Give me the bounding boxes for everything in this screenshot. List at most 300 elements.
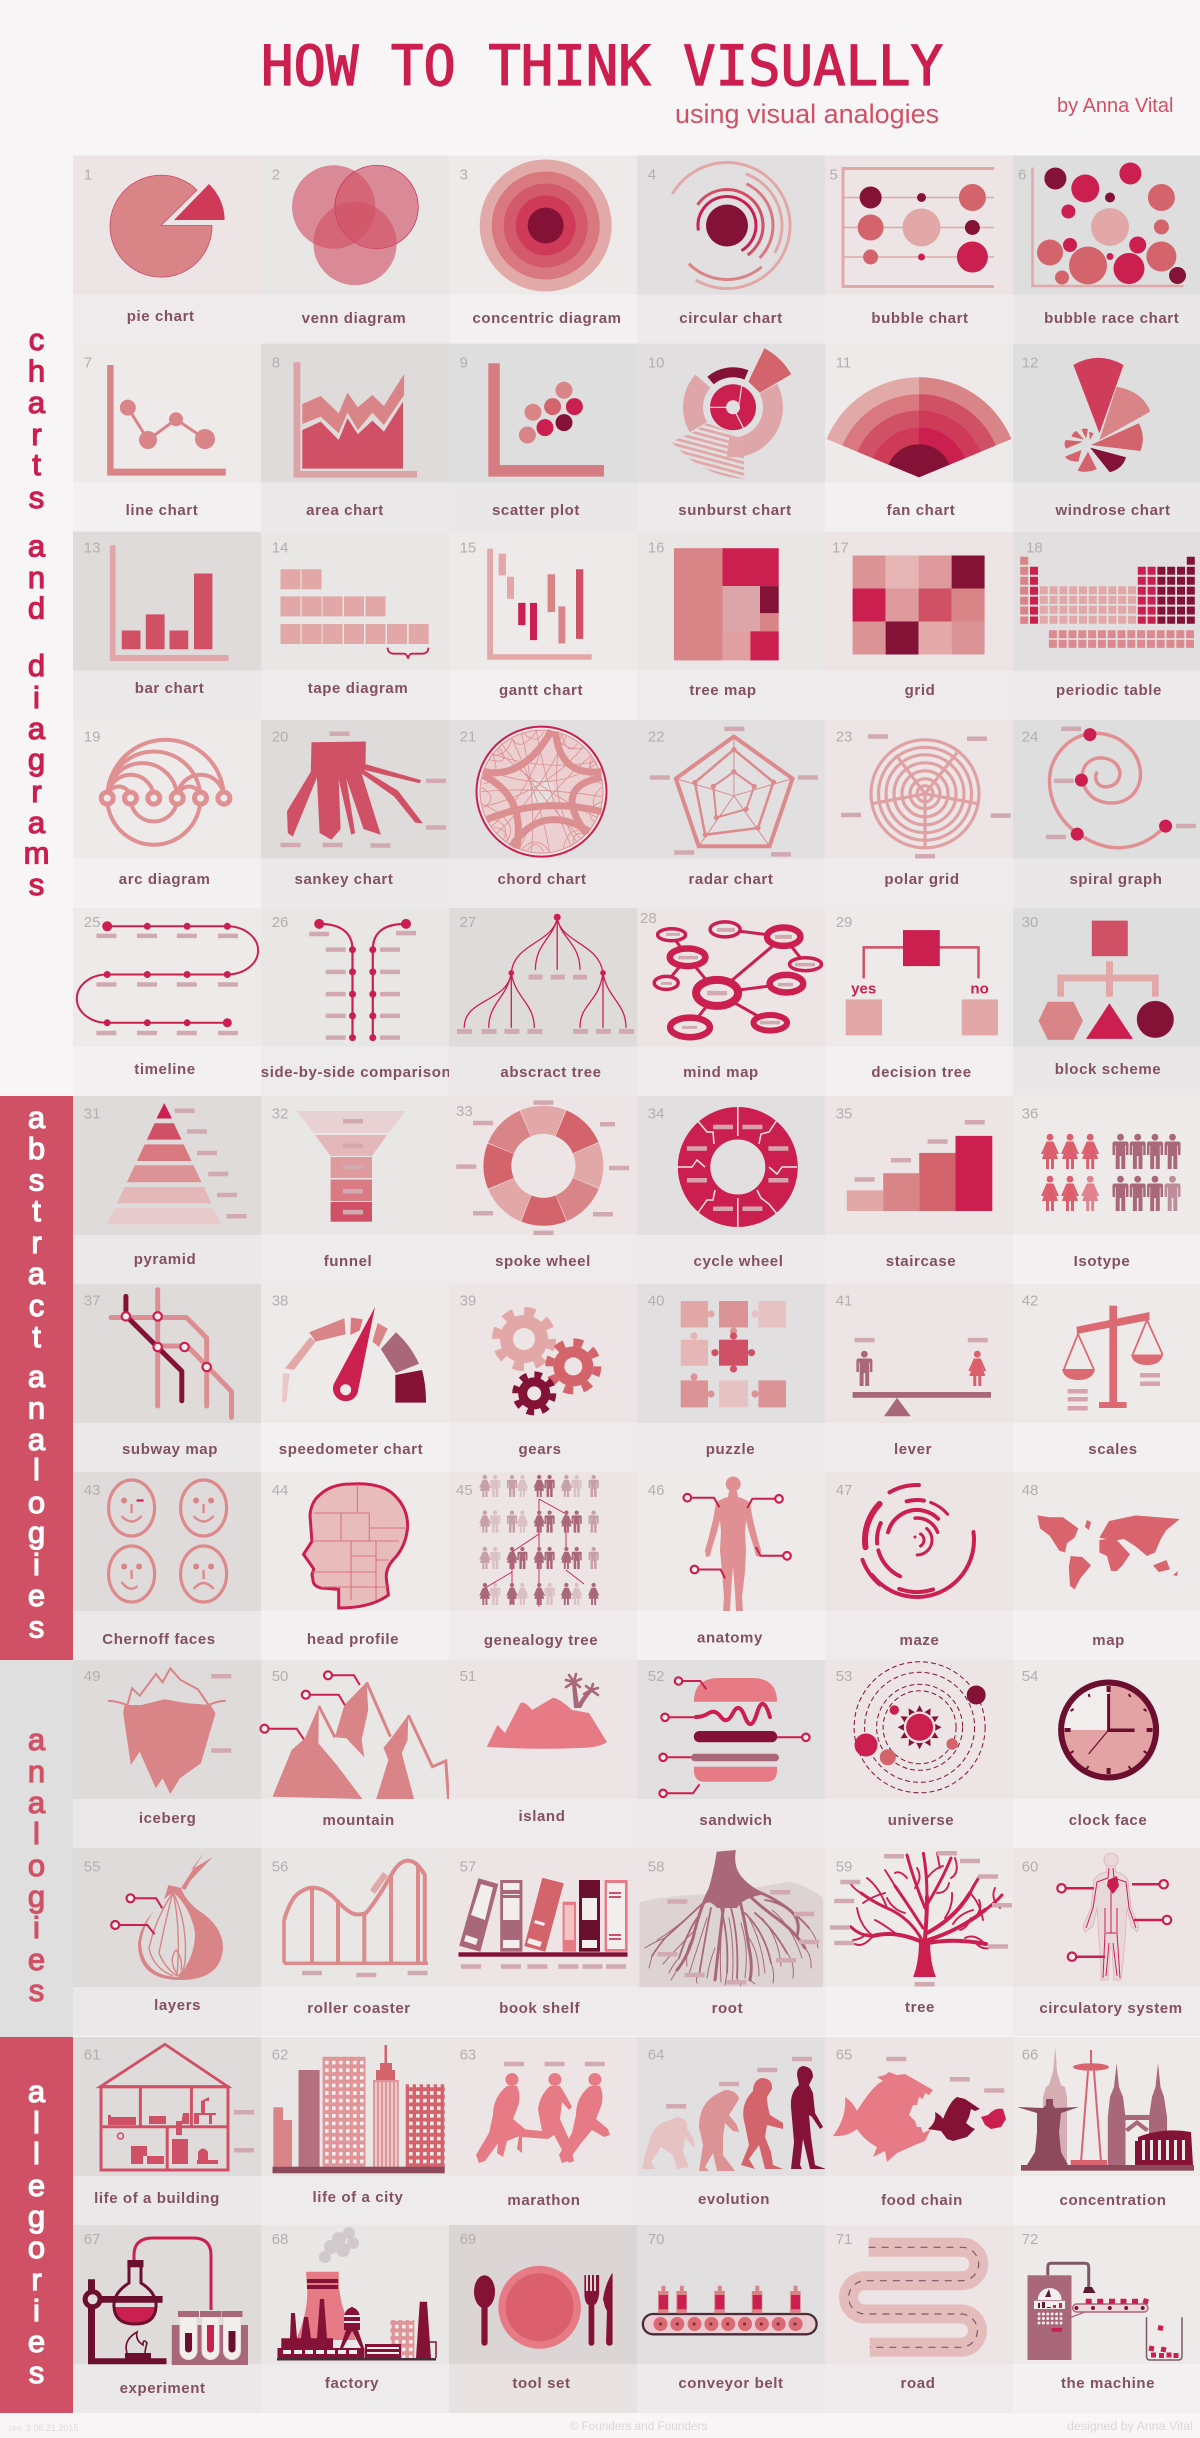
number: 47	[836, 1482, 852, 1499]
panel: 28 mind map	[637, 908, 826, 1096]
label: chord chart	[497, 871, 587, 888]
number: 52	[648, 1668, 664, 1685]
label: circular chart	[679, 310, 783, 327]
label: life of a building	[94, 2190, 220, 2207]
icon: clock face	[1061, 1682, 1156, 1778]
section label: abstract analogies: abstract	[28, 1100, 46, 1354]
panel: 4 circular chart	[637, 139, 826, 344]
panel: 31 pyramid	[73, 1096, 262, 1284]
label: fan chart	[887, 502, 955, 519]
number: 23	[836, 728, 852, 745]
number: 24	[1022, 728, 1038, 745]
panel: 45 genealogy tree	[449, 1472, 638, 1660]
footer: revision: rev. 3 08.21.2015	[9, 2423, 78, 2433]
icon: root	[639, 1850, 823, 1987]
panel: 27 abstract tree	[449, 908, 638, 1096]
panel: 65 food chain	[825, 2037, 1014, 2225]
icon: pie chart	[110, 175, 225, 277]
panel: 2 venn diagram	[261, 156, 450, 344]
panel: 35 staircase	[825, 1096, 1014, 1284]
panel: 22 radar chart	[637, 720, 826, 908]
number: 66	[1022, 2046, 1038, 2064]
label: iceberg	[139, 1810, 196, 1827]
label: gantt chart	[499, 682, 583, 699]
icon: venn	[292, 165, 418, 285]
label: sankey chart	[295, 871, 393, 888]
sidebar: analogies background	[0, 1660, 73, 2037]
number: 4	[648, 166, 656, 184]
label: road	[901, 2375, 935, 2392]
panel: 26 side-by-side comparison	[261, 908, 451, 1096]
icon: radar chart	[650, 727, 818, 857]
icon: head profile	[304, 1484, 408, 1608]
panel: 14 tape diagram	[261, 532, 450, 720]
icon: side-by-side	[309, 919, 416, 1041]
panel: 71 road	[825, 2225, 1014, 2413]
label: root	[712, 2000, 743, 2017]
icon: gears	[497, 1312, 597, 1412]
panel: 11 fan chart	[825, 344, 1014, 532]
number: 14	[272, 540, 288, 557]
icon: puzzle	[681, 1301, 786, 1407]
panel: 57 book shelf	[449, 1848, 638, 2036]
panel: 60 circulatory system	[1013, 1848, 1200, 2036]
panel: 17 grid	[825, 532, 1014, 720]
number: 6	[1018, 166, 1026, 184]
label: map	[1092, 1632, 1125, 1649]
panel: 20 sankey chart	[261, 720, 450, 908]
panel: 36 isotype	[1013, 1096, 1200, 1284]
number: 57	[460, 1858, 476, 1876]
icon: factory	[277, 2227, 436, 2360]
panel: 64 evolution	[637, 2037, 826, 2225]
label: venn diagram	[302, 310, 406, 327]
number: 58	[648, 1858, 664, 1876]
label: marathon	[507, 2192, 581, 2209]
panel: 37 subway map	[73, 1284, 262, 1472]
panel: 61 life of a building	[73, 2037, 262, 2225]
number: 40	[648, 1292, 664, 1310]
section label: charts and diagrams: charts	[28, 322, 46, 515]
icon: building	[100, 2044, 254, 2170]
panel: 10 sunburst chart	[637, 344, 826, 532]
panel: 53 universe	[825, 1660, 1014, 1848]
panel: 56 roller coaster	[261, 1848, 450, 2036]
number: 26	[272, 914, 288, 931]
label: windrose chart	[1054, 502, 1171, 519]
number: 1	[84, 166, 92, 184]
label: puzzle	[706, 1441, 755, 1458]
label: line chart	[126, 502, 198, 519]
icon: marathon runners	[476, 2062, 610, 2163]
number: 69	[460, 2231, 476, 2248]
label: tape diagram	[308, 680, 408, 697]
panel: 16 tree map	[637, 532, 826, 720]
section label: charts and diagrams: and	[28, 529, 46, 626]
label: periodic table	[1056, 682, 1162, 699]
number: 32	[272, 1106, 288, 1122]
number: 59	[836, 1858, 852, 1876]
label: spoke wheel	[495, 1253, 591, 1270]
label: bubble chart	[871, 310, 969, 327]
number: 30	[1022, 914, 1038, 931]
number: 29	[836, 914, 852, 931]
panel: 55 layers	[73, 1848, 262, 2036]
number: 72	[1022, 2231, 1038, 2248]
label: scales	[1088, 1441, 1138, 1458]
panel: 23 polar grid	[825, 720, 1014, 908]
icon: cycle wheel	[677, 1106, 797, 1228]
icon: area chart	[294, 362, 417, 478]
label: universe	[888, 1812, 954, 1829]
number: 44	[272, 1482, 288, 1499]
number: 56	[272, 1858, 288, 1876]
panel: 18 periodic table	[1013, 532, 1200, 720]
sidebar: abstract analogies background	[0, 1096, 73, 1660]
label: book shelf	[499, 2000, 581, 2017]
icon: world map	[1037, 1515, 1180, 1590]
label: grid	[905, 682, 935, 699]
icon: island	[487, 1674, 607, 1749]
icon: isotype	[1041, 1134, 1180, 1211]
panel: 68 factory	[261, 2225, 450, 2413]
icon: funnel	[297, 1111, 406, 1222]
number: 25	[84, 914, 100, 931]
panel: 33 spoke wheel	[449, 1096, 638, 1284]
section label: abstract analogies: analogies	[28, 1359, 46, 1644]
icon: speedometer	[282, 1307, 426, 1403]
panel: 1 pie chart	[73, 156, 262, 344]
label: pie chart	[127, 308, 195, 325]
number: 10	[648, 355, 664, 372]
section label: charts and diagrams	[24, 322, 49, 902]
icon: experiment	[85, 2238, 248, 2365]
number: 55	[84, 1858, 100, 1876]
label: tree	[905, 1999, 935, 2016]
label: gears	[518, 1441, 562, 1458]
panel: 49 iceberg	[73, 1660, 262, 1848]
icon: pyramid	[107, 1103, 247, 1224]
icon: tree	[457, 914, 634, 1034]
data labels	[456, 1100, 629, 1235]
panel: 12 windrose chart	[1013, 344, 1200, 532]
panel: 25 timeline	[73, 908, 262, 1096]
panel: 21 chord chart	[449, 720, 638, 908]
number: 51	[460, 1668, 476, 1685]
icon: block scheme	[1039, 921, 1174, 1040]
icon: scatter plot	[488, 363, 604, 477]
number: 54	[1022, 1668, 1038, 1685]
icon: tool set	[474, 2266, 613, 2349]
number: 42	[1022, 1292, 1038, 1310]
panel: 39 gears	[449, 1284, 638, 1472]
icon: mind map	[654, 922, 822, 1037]
icon: decision tree	[846, 930, 998, 1035]
number: 35	[836, 1106, 852, 1122]
icon: lever	[853, 1338, 991, 1416]
label: circulatory system	[1039, 2000, 1183, 2017]
label: clock face	[1069, 1812, 1147, 1829]
label: layers	[154, 1997, 201, 2014]
icon: mountain	[260, 1671, 448, 1799]
label: tree map	[689, 682, 757, 699]
label: factory	[325, 2375, 379, 2392]
icon: city	[272, 2045, 445, 2173]
panel: 8 area chart	[261, 344, 450, 532]
icon: timeline	[77, 921, 258, 1035]
author: by Anna Vital	[1057, 95, 1173, 117]
icon: road	[849, 2247, 979, 2347]
label: sandwich	[699, 1812, 773, 1829]
icon: staircase	[847, 1120, 992, 1211]
panel: 7 line chart	[73, 344, 262, 532]
number: 37	[84, 1292, 100, 1310]
number: 39	[460, 1292, 476, 1310]
number: 15	[460, 540, 476, 557]
panel: 50 mountain	[260, 1660, 450, 1848]
label: decision tree	[871, 1064, 972, 1081]
label: area chart	[306, 502, 384, 519]
sidebar: allegories background	[0, 2037, 73, 2413]
label: subway map	[122, 1441, 218, 1458]
label: speedometer chart	[279, 1441, 423, 1458]
panel: 13 bar chart	[73, 532, 262, 720]
label: the machine	[1061, 2375, 1155, 2392]
number: 18	[1026, 540, 1043, 557]
number: 20	[272, 728, 288, 745]
number: 19	[84, 728, 100, 745]
icon: sunburst	[672, 348, 792, 479]
number: 13	[84, 540, 100, 557]
number: 9	[460, 355, 468, 372]
icon: spiral graph	[1046, 727, 1196, 848]
panel: 67 experiment	[73, 2225, 262, 2413]
panel: 48 map	[1013, 1472, 1200, 1660]
number: 38	[272, 1292, 288, 1310]
label: mind map	[683, 1064, 759, 1081]
icon: conveyor belt	[643, 2286, 817, 2334]
number: 41	[836, 1292, 852, 1310]
number: 62	[272, 2046, 288, 2064]
icon: subway map	[111, 1290, 232, 1417]
icon: decision tree: no	[970, 981, 989, 998]
panel: 6 bubble race chart	[1013, 156, 1200, 344]
panel: 29 decision tree	[825, 908, 1014, 1096]
label: conveyor belt	[678, 2375, 784, 2392]
label: genealogy tree	[484, 1632, 598, 1649]
icon: polar grid	[841, 734, 1011, 858]
panel: 34 cycle wheel	[637, 1096, 826, 1284]
label: mountain	[322, 1812, 395, 1829]
icon: scales	[1062, 1306, 1163, 1410]
panel: 66 concentration	[1013, 2037, 1200, 2225]
icon: concentration skyline	[1017, 2047, 1194, 2171]
icon: genealogy tree	[479, 1475, 599, 1607]
icon: circulatory system	[1057, 1853, 1171, 1980]
icon: the machine	[1028, 2263, 1182, 2360]
icon: bar chart	[110, 545, 228, 661]
icon: tree	[830, 1851, 1012, 1986]
label: head profile	[307, 1631, 399, 1648]
icon: iceberg	[108, 1668, 231, 1794]
label: timeline	[134, 1061, 196, 1078]
icon: onion layers	[111, 1852, 223, 1980]
label: cycle wheel	[694, 1253, 784, 1270]
number: 7	[84, 355, 92, 372]
label: polar grid	[884, 871, 960, 888]
label: concentration	[1060, 2192, 1166, 2209]
number: 61	[84, 2046, 100, 2064]
icon: line chart	[107, 365, 226, 476]
panel: 72 the machine	[1013, 2225, 1200, 2413]
panel: 63 marathon	[449, 2037, 638, 2225]
panel: 62 life of a city	[261, 2037, 450, 2225]
icon: fan chart	[827, 377, 1011, 477]
icon: spoke wheel	[483, 1106, 604, 1226]
panel: 41 lever	[825, 1284, 1014, 1472]
number: 60	[1022, 1858, 1038, 1876]
label: bubble race chart	[1044, 310, 1179, 327]
number: 8	[272, 355, 280, 372]
label: bar chart	[135, 680, 204, 697]
icon: tape diagram	[280, 569, 429, 659]
panel: 30 block scheme	[1013, 908, 1200, 1096]
label: sunburst chart	[678, 502, 792, 519]
label: block scheme	[1055, 1061, 1161, 1078]
panel: 9 scatter plot	[449, 344, 638, 532]
label: life of a city	[313, 2189, 404, 2206]
footer: copyright: © Founders and Founders	[570, 2419, 707, 2433]
title: HOW TO THINK VISUALLY	[261, 34, 943, 98]
number: 3	[460, 166, 468, 184]
number: 16	[648, 540, 664, 557]
section label: charts and diagrams: diagrams	[24, 648, 49, 902]
panel: 19 arc diagram	[73, 720, 262, 908]
label: pyramid	[134, 1251, 196, 1268]
icon: food chain	[833, 2057, 1006, 2162]
number: 70	[648, 2231, 664, 2248]
icon: circular chart	[641, 139, 813, 312]
label: side-by-side comparison	[261, 1064, 451, 1081]
number: 27	[460, 914, 476, 931]
label: tool set	[512, 2375, 571, 2392]
number: 45	[456, 1482, 473, 1499]
panel: 59 tree	[825, 1848, 1014, 2036]
label: funnel	[324, 1253, 372, 1270]
number: 71	[836, 2231, 852, 2248]
label: evolution	[698, 2191, 770, 2208]
icon: windrose	[1064, 358, 1150, 472]
label: Chernoff faces	[102, 1631, 216, 1648]
number: 12	[1022, 355, 1038, 372]
number: 22	[648, 728, 664, 745]
icon: bubble chart	[843, 168, 994, 286]
number: 67	[84, 2231, 100, 2248]
panel: 15 gantt chart	[449, 532, 638, 720]
section label: allegories: allegories	[28, 2074, 46, 2390]
number: 64	[648, 2046, 664, 2064]
icon: gantt chart	[487, 549, 592, 660]
number: 65	[836, 2046, 852, 2064]
panel: 43 Chernoff faces	[73, 1472, 262, 1660]
number: 63	[460, 2046, 476, 2064]
icon: bubble race	[1032, 162, 1186, 286]
panel: 70 conveyor belt	[637, 2225, 826, 2413]
label: island	[519, 1808, 565, 1825]
panel: 24 spiral graph	[1013, 720, 1200, 908]
panel: 58 root	[637, 1848, 826, 2036]
label: lever	[894, 1441, 932, 1458]
icon: sandwich	[659, 1677, 810, 1797]
number: 17	[832, 540, 849, 557]
number: 50	[272, 1668, 288, 1685]
icon: universe	[854, 1662, 986, 1793]
number: 53	[836, 1668, 852, 1685]
number: 28	[640, 910, 657, 927]
section label: abstract analogies	[28, 1100, 46, 1644]
icon: faces	[109, 1480, 227, 1602]
label: anatomy	[697, 1630, 763, 1647]
panel: 44 head profile	[261, 1472, 450, 1660]
icon: grid	[853, 556, 985, 654]
number: 48	[1022, 1482, 1038, 1499]
number: 21	[460, 728, 476, 745]
number: 11	[836, 355, 851, 372]
icon: concentric circles	[480, 160, 612, 292]
label: staircase	[886, 1253, 956, 1270]
label: maze	[900, 1632, 939, 1649]
label: scatter plot	[492, 502, 580, 519]
number: 68	[272, 2231, 288, 2248]
icon: book shelf	[458, 1878, 628, 1969]
label: arc diagram	[119, 871, 210, 888]
label: Isotype	[1074, 1253, 1130, 1270]
number: 5	[830, 166, 838, 184]
number: 49	[84, 1668, 100, 1685]
footer: designer credit: designed by Anna Vital	[1067, 2419, 1193, 2433]
panel: 69 tool set	[449, 2225, 638, 2413]
panel: 5 bubble chart	[825, 156, 1014, 344]
icon: roller coaster	[284, 1861, 428, 1977]
panel: 42 scales	[1013, 1284, 1200, 1472]
icon: periodic table	[1024, 557, 1194, 644]
section label: analogies: analogies	[28, 1722, 46, 2008]
panel: 3 concentric diagram	[449, 156, 638, 344]
panel: 40 puzzle	[637, 1284, 826, 1472]
number: 31	[84, 1106, 100, 1122]
number: 43	[84, 1482, 100, 1499]
label: radar chart	[689, 871, 773, 888]
panel: 47 maze	[825, 1458, 1014, 1660]
panel: 52 sandwich	[637, 1660, 826, 1848]
icon: tree map	[674, 548, 779, 660]
panel: 38 speedometer chart	[261, 1284, 450, 1472]
label: spiral graph	[1069, 871, 1163, 888]
panel: 54 clock face	[1013, 1660, 1200, 1848]
icon: decision tree: yes	[851, 981, 876, 998]
label: experiment	[120, 2380, 206, 2397]
subtitle: using visual analogies	[675, 99, 939, 129]
icon: sankey	[280, 732, 446, 848]
number: 33	[456, 1103, 473, 1120]
panel: 32 funnel	[261, 1096, 450, 1284]
label: concentric diagram	[472, 310, 622, 327]
icon: chord chart	[476, 727, 606, 857]
icon: evolution	[642, 2057, 826, 2171]
label: roller coaster	[307, 2000, 411, 2017]
label: abscract tree	[500, 1064, 602, 1081]
number: 34	[648, 1106, 664, 1122]
